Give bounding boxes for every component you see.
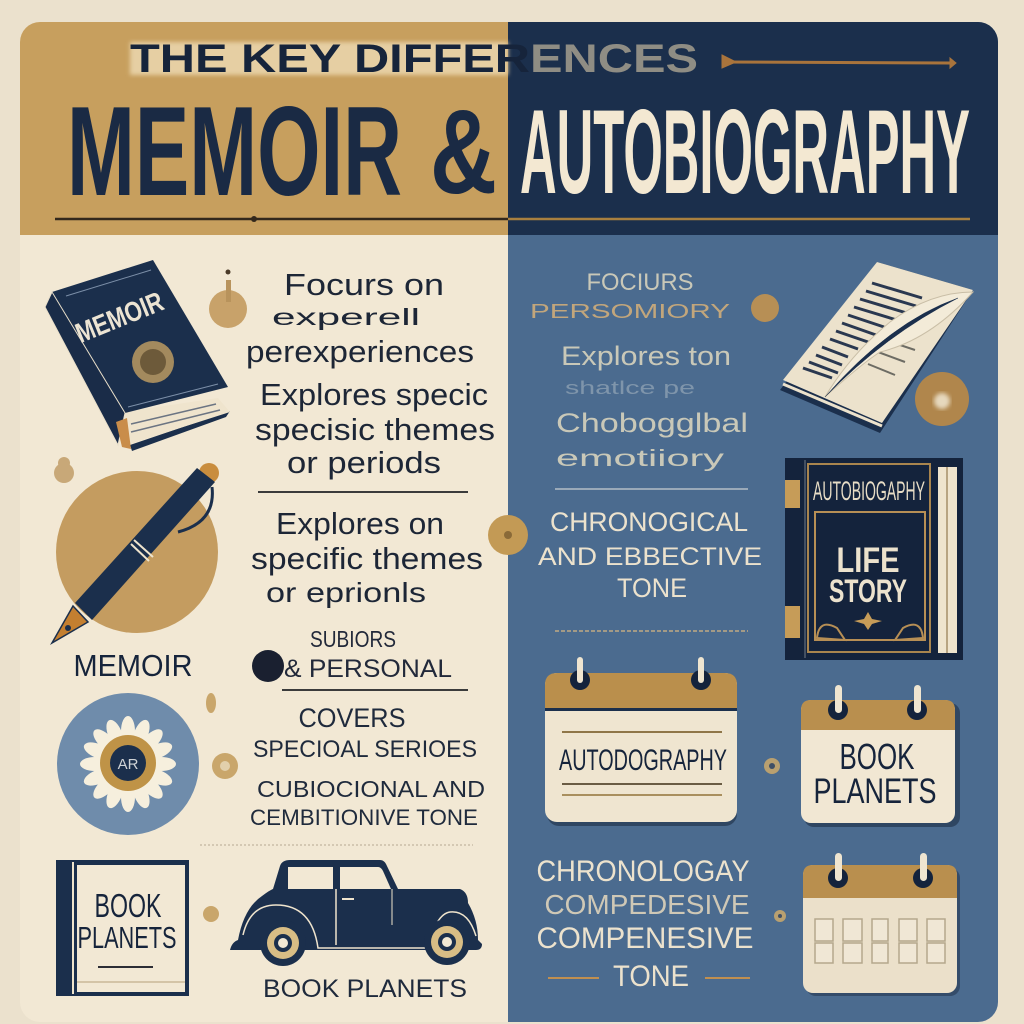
text block: chronological: TONE	[617, 573, 687, 603]
text block: covers: CUBIOCIONAL AND	[257, 776, 485, 802]
icon: daisy: AR	[118, 756, 139, 773]
icon: book planets cover: BOOK	[94, 887, 162, 924]
icon: book planets calendar: PLANETS	[814, 772, 936, 811]
connector dot	[488, 515, 528, 555]
decorative dots left	[203, 693, 238, 922]
text block: memoir focus: Explores specic	[260, 377, 488, 412]
heading: the key differences: THE KEY DIFFER ENCES	[130, 37, 698, 81]
icon: pen in gold circle	[52, 457, 219, 643]
text block: chronology: COMPENESIVE	[536, 922, 754, 955]
text block: right top: PERSOMIORY	[530, 301, 730, 323]
text block: covers: SPECIOAL SERIOES	[253, 736, 477, 763]
text block: right top: Explores ton	[561, 341, 731, 371]
text block: covers	[250, 703, 485, 830]
icon: vintage car	[230, 860, 482, 966]
arrow: header quill line	[722, 55, 956, 68]
icon: life story book: STORY	[829, 573, 907, 609]
icon: memoir book	[45, 260, 230, 451]
decorative pin	[209, 270, 247, 328]
text block: right top	[530, 269, 748, 471]
text block: chronology: CHRONOLOGAY	[536, 855, 750, 888]
text block: chronology: TONE	[613, 960, 689, 993]
icon: life story book	[785, 458, 963, 660]
divider	[258, 491, 468, 493]
icon: autobiography calendar: AUTODOGRAPHY	[559, 744, 727, 777]
text block: explores	[251, 506, 483, 608]
icon: grid calendar	[803, 853, 960, 996]
icon: daisy	[57, 693, 199, 835]
label: memoir: MEMOIR	[74, 648, 192, 683]
text block: covers: CEMBITIONIVE TONE	[250, 805, 478, 830]
icon: book planets cover: PLANETS	[78, 920, 176, 955]
title: memoir: MEMOIR	[67, 80, 402, 222]
text block: right top: Chobogglbal	[556, 408, 748, 438]
text block: chronological: AND EBBECTIVE	[538, 543, 762, 571]
text block: memoir focus: Focurs on	[284, 267, 444, 302]
text block: memoir focus: or periods	[287, 445, 441, 480]
title rule	[55, 216, 970, 222]
divider	[555, 488, 748, 490]
icon: autobiography calendar	[545, 657, 737, 826]
icon: paper and quill	[780, 262, 973, 433]
text block: memoir focus: experell	[272, 304, 420, 330]
divider: dotted	[200, 844, 473, 846]
text block: right top: FOCIURS	[586, 269, 694, 296]
text block: right top: shatlce pe	[565, 378, 695, 398]
text block: memoir focus: specisic themes	[255, 412, 495, 447]
decorative dots right	[751, 294, 786, 922]
divider	[555, 630, 748, 632]
text block: chronological	[538, 507, 762, 603]
icon: book planets calendar: BOOK	[840, 736, 914, 777]
text block: explores: or eprionls	[266, 577, 426, 608]
text block: memoir focus: perexperiences	[246, 334, 474, 369]
text block: chronology: COMPEDESIVE	[544, 889, 750, 920]
text block: subjors and personal	[252, 626, 468, 690]
label: book planets: BOOK PLANETS	[263, 975, 467, 1003]
text block: chronology	[536, 855, 754, 993]
icon: life story book: LIFE	[836, 541, 900, 580]
icon: memoir book: MEMOIR	[71, 286, 168, 349]
text block: memoir focus	[246, 267, 495, 480]
title: ampersand: &	[430, 85, 497, 219]
heading highlight	[130, 42, 508, 75]
text block: chronological: CHRONOGICAL	[550, 507, 748, 537]
icon: life story book: AUTOBIOGAPHY	[813, 476, 925, 506]
text block: explores: Explores on	[276, 506, 444, 541]
text block: explores: specific themes	[251, 541, 483, 576]
icon: book planets cover	[56, 860, 189, 996]
text block: subjors and personal: & PERSONAL	[284, 655, 452, 683]
text block: subjors and personal: SUBIORS	[310, 626, 396, 652]
icon: book planets calendar	[801, 685, 960, 827]
text block: covers: COVERS	[298, 703, 406, 733]
text block: right top: emotiiory	[556, 445, 725, 471]
